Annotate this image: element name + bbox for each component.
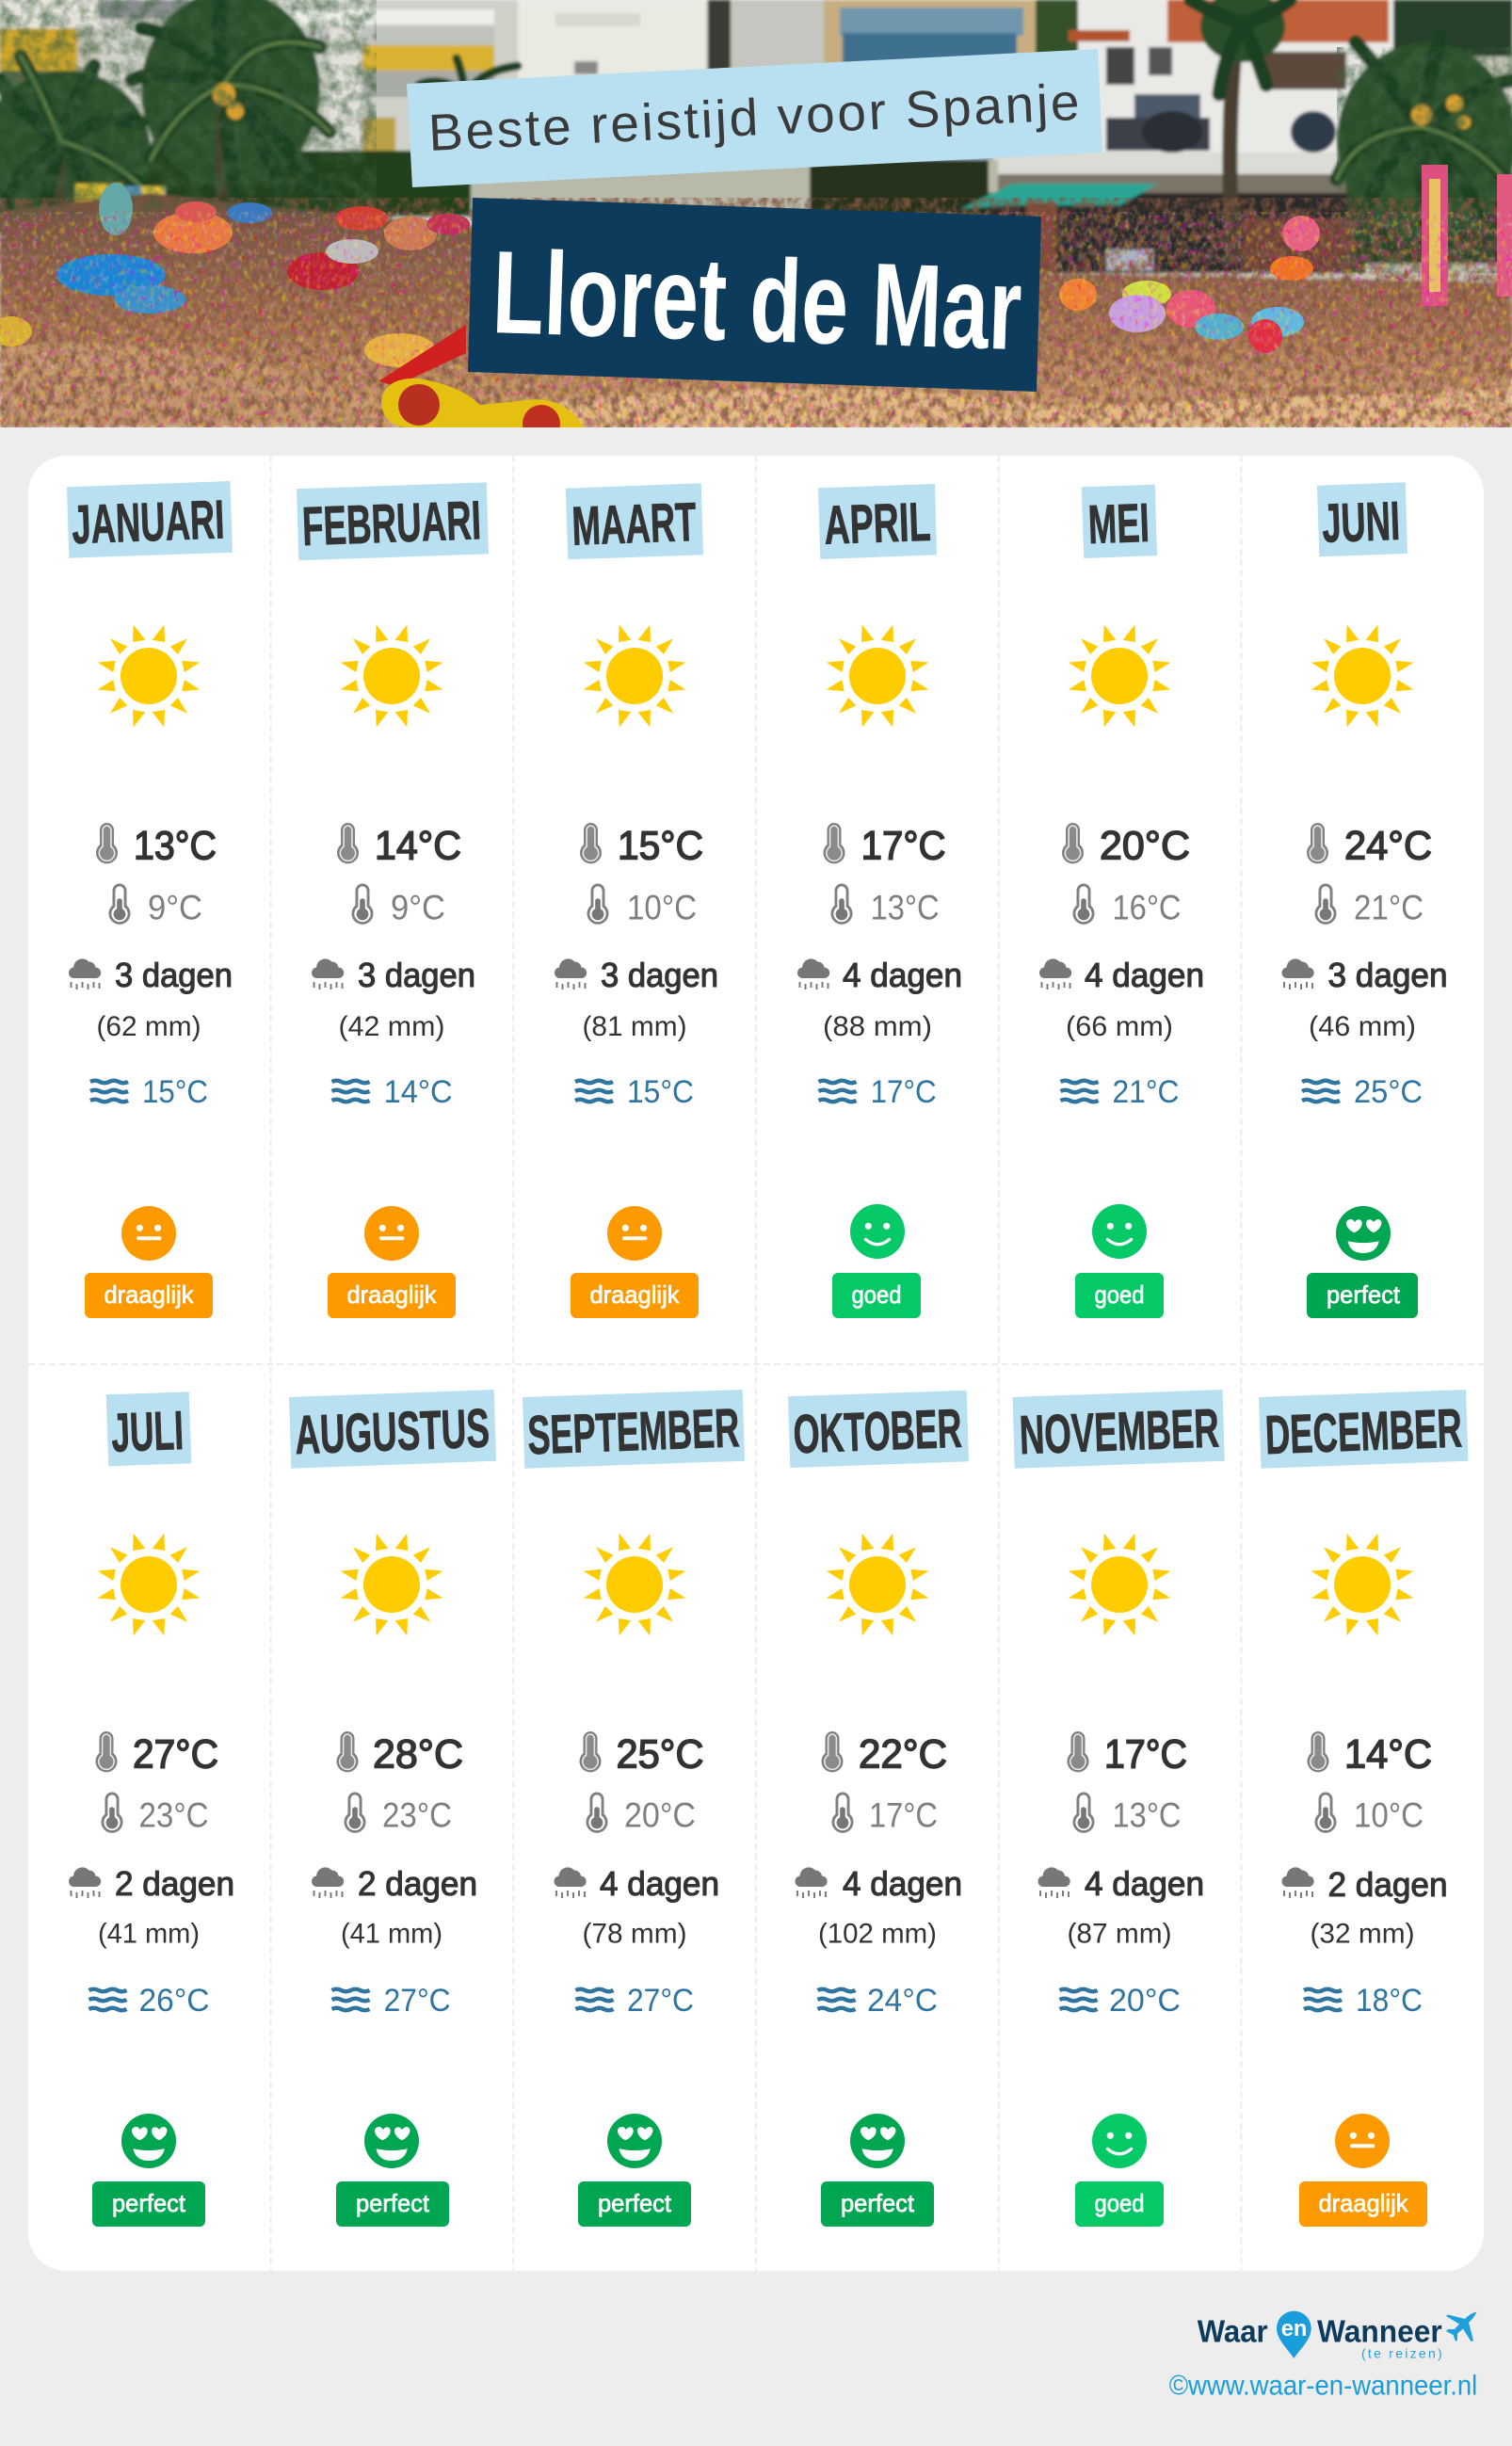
icon: low temperature: [587, 883, 608, 925]
icon: waves: [817, 1989, 855, 2010]
icon: sun: [341, 625, 442, 727]
rating badge: [336, 2181, 449, 2227]
icon: high temperature: [96, 1731, 117, 1772]
sea temperature: 14°C: [384, 1074, 453, 1110]
min temperature: 21°C: [1354, 889, 1424, 926]
icon: neutral face: [121, 1206, 176, 1261]
icon: happy face: [1092, 1204, 1147, 1259]
rating badge: draaglijk: [346, 1280, 437, 1309]
rating badge: perfect: [598, 2189, 672, 2217]
min temperature: 20°C: [624, 1796, 696, 1834]
icon: rain cloud: [1281, 1867, 1314, 1898]
rating badge: [1075, 1273, 1164, 1318]
rating badge: [1307, 1273, 1418, 1318]
icon: high temperature: [337, 823, 359, 863]
rainfall: (66 mm): [1066, 1011, 1173, 1042]
sea temperature: 18°C: [1356, 1983, 1423, 2019]
icon: map pin: [1277, 2311, 1311, 2358]
logo: Waar en Wanneer: (te reizen): [1361, 2345, 1442, 2360]
icon: rain cloud: [312, 958, 344, 990]
month label: september: [523, 1390, 745, 1469]
month label: januari: [67, 481, 233, 558]
month label: mei: [1082, 485, 1157, 558]
icon: rain cloud: [1037, 1867, 1070, 1898]
sea temperature: 15°C: [142, 1074, 208, 1110]
month panel: februari: [297, 482, 489, 1318]
icon: waves: [819, 1081, 857, 1102]
month label: juli: [106, 1392, 191, 1466]
month label: februari: FEBRUARI: [301, 490, 482, 557]
sea temperature: 26°C: [139, 1983, 209, 2019]
title banner: [468, 198, 1041, 392]
min temperature: 16°C: [1113, 889, 1181, 926]
icon: neutral face: [364, 1206, 419, 1261]
max temperature: 20°C: [1100, 823, 1190, 868]
month panel: april: [797, 484, 962, 1318]
month label: februari: [297, 482, 489, 560]
month panel: juli: [69, 1392, 234, 2227]
icon: sun: [827, 625, 928, 727]
month panel: augustus: [289, 1390, 496, 2227]
rating badge: [821, 2181, 934, 2227]
icon: low temperature: [109, 883, 130, 925]
rainfall: (62 mm): [96, 1011, 201, 1042]
min temperature: 23°C: [139, 1796, 209, 1834]
min temperature: 10°C: [1354, 1796, 1424, 1834]
logo: Waar en Wanneer: Wanneer: [1317, 2313, 1442, 2348]
month panel: oktober: [788, 1391, 969, 2227]
rating badge: perfect: [841, 2189, 915, 2217]
rainfall: (42 mm): [339, 1011, 444, 1042]
rating badge: perfect: [356, 2189, 430, 2217]
sea temperature: 24°C: [867, 1983, 938, 2019]
icon: rain cloud: [555, 958, 587, 990]
website url: ©www.waar-en-wanneer.nl: [1169, 2370, 1477, 2401]
beach umbrellas: [0, 165, 1512, 367]
icon: rain cloud: [1281, 958, 1314, 990]
icon: sun: [1069, 1534, 1170, 1635]
icon: low temperature: [345, 1793, 365, 1833]
icon: sun: [98, 1534, 200, 1635]
icon: low temperature: [1314, 883, 1337, 925]
month panel: december: [1259, 1390, 1469, 2227]
icon: high temperature: [1307, 823, 1328, 863]
icon: rain cloud: [795, 1867, 828, 1898]
icon: neutral face: [607, 1206, 662, 1261]
rating badge: [1075, 2181, 1164, 2227]
month panel: maart: [555, 483, 718, 1318]
title banner: Lloret de Mar: [491, 227, 1023, 375]
rainfall: (78 mm): [582, 1919, 687, 1949]
rainfall: (32 mm): [1311, 1919, 1414, 1949]
month label: augustus: AUGUSTUS: [294, 1398, 491, 1466]
min temperature: 9°C: [391, 889, 445, 926]
sea temperature: 17°C: [871, 1074, 937, 1110]
icon: high temperature: [1062, 823, 1084, 863]
icon: high temperature: [1068, 1731, 1088, 1772]
month label: juli: JULI: [110, 1400, 185, 1464]
icon: sun: [1311, 625, 1413, 727]
max temperature: 15°C: [618, 823, 703, 868]
rainfall: (41 mm): [98, 1919, 200, 1949]
rain days: 4 dagen: [843, 956, 962, 994]
rain days: 4 dagen: [600, 1864, 719, 1903]
icon: happy face: [850, 1204, 905, 1259]
month panel: september: [523, 1390, 745, 2227]
month panel: januari: [67, 481, 233, 1318]
max temperature: 13°C: [134, 823, 217, 868]
white calendar panel: [28, 456, 1484, 2271]
decorative palm masses: [0, 0, 1512, 240]
icon: high temperature: [823, 823, 845, 863]
month label: augustus: [289, 1390, 496, 1469]
min temperature: 23°C: [382, 1796, 452, 1834]
icon: waves: [88, 1989, 126, 2010]
inflatable toy on the beach: [378, 325, 584, 427]
min temperature: 10°C: [627, 889, 697, 926]
month label: maart: [566, 483, 703, 559]
rain days: 3 dagen: [115, 956, 233, 994]
icon: rain cloud: [554, 1867, 587, 1898]
logo: Waar en Wanneer: Waar: [1198, 2313, 1268, 2348]
rating badge: [1299, 2181, 1427, 2227]
rainfall: (46 mm): [1309, 1011, 1416, 1042]
icon: sun: [827, 1534, 928, 1635]
icon: sun: [584, 1534, 685, 1635]
icon: airplane: [1446, 2312, 1476, 2341]
rating badge: draaglijk: [589, 1280, 680, 1309]
icon: sun: [1069, 625, 1170, 727]
min temperature: 13°C: [1113, 1796, 1181, 1834]
rating badge: perfect: [1327, 1280, 1401, 1309]
icon: rain cloud: [312, 1867, 344, 1898]
sea temperature: 27°C: [384, 1983, 451, 2019]
rain days: 2 dagen: [1327, 1865, 1448, 1904]
icon: star-eyed face: [121, 2114, 176, 2168]
rating badge: [328, 1273, 456, 1318]
icon: sun: [341, 1534, 442, 1635]
icon: rain cloud: [1039, 958, 1071, 990]
rainfall: (41 mm): [341, 1919, 442, 1949]
icon: waves: [1060, 1081, 1098, 1102]
rain days: 3 dagen: [1327, 956, 1448, 994]
sea temperature: 21°C: [1113, 1074, 1179, 1110]
rating badge: goed: [851, 1280, 902, 1309]
icon: star-eyed face: [607, 2114, 662, 2168]
icon: waves: [1302, 1081, 1340, 1102]
subtitle banner: [407, 49, 1102, 187]
icon: neutral face: [1335, 2114, 1390, 2168]
month label: juni: [1317, 482, 1407, 556]
max temperature: 17°C: [861, 823, 946, 868]
max temperature: 28°C: [373, 1732, 463, 1778]
month label: oktober: [788, 1391, 969, 1468]
icon: waves: [331, 1989, 369, 2010]
sea temperature: 25°C: [1354, 1074, 1423, 1110]
icon: high temperature: [337, 1731, 358, 1772]
month label: april: APRIL: [823, 491, 932, 556]
icon: low temperature: [1073, 883, 1094, 925]
rating badge: perfect: [112, 2189, 186, 2217]
icon: high temperature: [821, 1731, 844, 1772]
month label: mei: MEI: [1087, 492, 1150, 555]
icon: waves: [575, 1081, 613, 1102]
min temperature: 13°C: [871, 889, 940, 926]
month label: januari: JANUARI: [71, 489, 225, 555]
sea temperature: 15°C: [627, 1074, 694, 1110]
max temperature: 14°C: [375, 823, 461, 868]
rainfall: (102 mm): [818, 1919, 937, 1949]
max temperature: 24°C: [1344, 823, 1432, 868]
icon: sun: [1311, 1534, 1413, 1635]
rain days: 4 dagen: [1085, 956, 1204, 994]
rainfall: (81 mm): [582, 1011, 687, 1042]
rainfall: (88 mm): [823, 1011, 932, 1042]
rain days: 4 dagen: [1085, 1864, 1204, 1903]
icon: star-eyed face: [364, 2114, 419, 2168]
rain days: 3 dagen: [358, 956, 475, 994]
icon: waves: [331, 1081, 369, 1102]
icon: rain cloud: [69, 1867, 101, 1898]
icon: sun: [584, 625, 685, 727]
month label: april: [818, 484, 937, 559]
max temperature: 22°C: [859, 1732, 947, 1778]
logo: Waar en Wanneer: [1198, 2311, 1476, 2360]
max temperature: 25°C: [616, 1732, 704, 1778]
month label: november: NOVEMBER: [1019, 1397, 1220, 1466]
header photo: Lloret de Mar beach: [0, 0, 1512, 443]
rating badge: goed: [1094, 1280, 1145, 1309]
icon: star-eyed face: [1336, 1206, 1391, 1261]
month label: maart: MAART: [571, 491, 698, 557]
icon: happy face: [1092, 2114, 1147, 2168]
rain days: 4 dagen: [843, 1864, 962, 1903]
sea temperature: 20°C: [1109, 1983, 1181, 2019]
icon: sun: [98, 625, 200, 727]
month label: juni: JUNI: [1321, 491, 1401, 555]
icon: low temperature: [1314, 1793, 1337, 1833]
icon: low temperature: [352, 883, 373, 925]
rating badge: [832, 1273, 921, 1318]
icon: high temperature: [96, 823, 118, 863]
icon: high temperature: [1307, 1731, 1329, 1772]
icon: high temperature: [580, 1731, 601, 1772]
rainfall: (87 mm): [1068, 1919, 1171, 1949]
icon: low temperature: [586, 1793, 608, 1833]
icon: low temperature: [1073, 1793, 1094, 1833]
icon: rain cloud: [69, 958, 101, 990]
max temperature: 27°C: [133, 1732, 218, 1778]
rating badge: [571, 1273, 699, 1318]
rating badge: goed: [1094, 2189, 1145, 2217]
rain days: 2 dagen: [115, 1864, 234, 1903]
month panel: juni: [1281, 482, 1448, 1318]
rating badge: [92, 2181, 205, 2227]
rating badge: draaglijk: [104, 1280, 194, 1309]
month label: september: SEPTEMBER: [526, 1397, 740, 1466]
logo: Waar en Wanneer: en: [1281, 2316, 1307, 2341]
icon: star-eyed face: [850, 2114, 905, 2168]
min temperature: 17°C: [869, 1796, 938, 1834]
min temperature: 9°C: [148, 889, 202, 926]
rain days: 2 dagen: [358, 1864, 477, 1903]
icon: waves: [576, 1989, 614, 2010]
month label: oktober: OKTOBER: [792, 1398, 963, 1465]
decorative beach crowd: [0, 193, 1512, 427]
month panel: mei: [1039, 485, 1204, 1318]
icon: high temperature: [580, 823, 602, 863]
sea temperature: 27°C: [627, 1983, 694, 2019]
max temperature: 17°C: [1104, 1732, 1187, 1778]
icon: rain cloud: [797, 958, 829, 990]
icon: waves: [1060, 1989, 1098, 2010]
month panel: november: [1013, 1390, 1225, 2227]
icon: low temperature: [832, 1793, 853, 1833]
max temperature: 14°C: [1344, 1732, 1432, 1778]
rating badge: [85, 1273, 213, 1318]
icon: waves: [90, 1081, 128, 1102]
rain days: 3 dagen: [601, 956, 718, 994]
icon: waves: [1304, 1989, 1342, 2010]
icon: low temperature: [830, 883, 853, 925]
icon: low temperature: [102, 1793, 122, 1833]
subtitle banner: Beste reistijd voor Spanje: [427, 72, 1081, 162]
month label: november: [1013, 1390, 1225, 1469]
rating badge: [578, 2181, 691, 2227]
rating badge: draaglijk: [1318, 2189, 1408, 2217]
